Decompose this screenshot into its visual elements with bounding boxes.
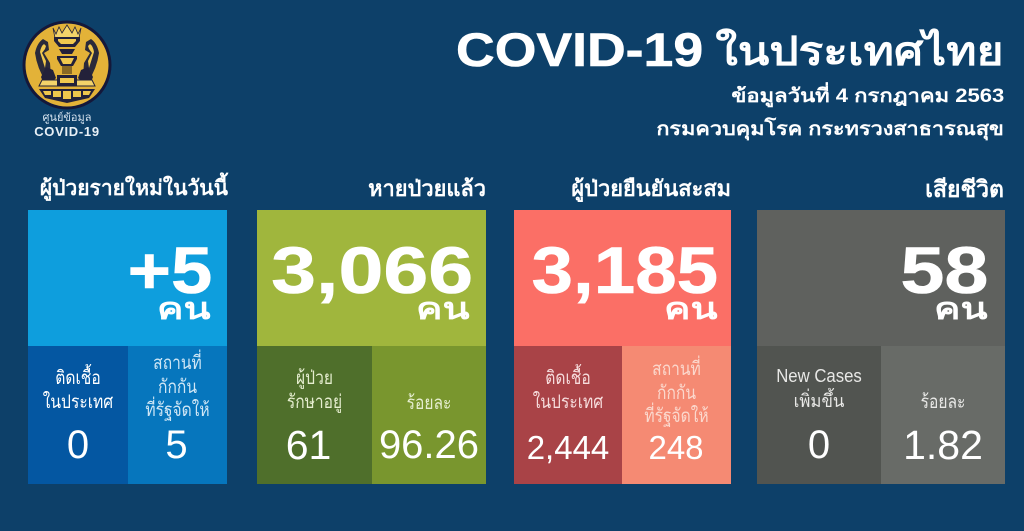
label: [43, 364, 113, 412]
number: 248: [648, 429, 704, 466]
label: [145, 350, 210, 421]
label: กักกัน: [657, 382, 696, 404]
value: 3,185: 3,185: [531, 233, 718, 307]
label: [533, 364, 603, 412]
date line: ข้อมูลวันที่ 4 กรกฎาคม 2563: [731, 86, 1004, 107]
label: เพิ่มขึ้น: [794, 391, 844, 411]
label: New Cases: [776, 366, 862, 386]
unit: คน: [157, 293, 211, 326]
title thai part: ในประเทศไทย: [716, 30, 1004, 74]
number: 0: [67, 423, 89, 467]
title latin part: COVID-19: [456, 23, 703, 76]
number: 61: [286, 422, 331, 468]
sub-panel: percent: [372, 346, 486, 484]
label: ในประเทศ: [43, 392, 113, 412]
logo caption: COVID-19: COVID-19: [34, 124, 100, 139]
unit: คน: [664, 293, 718, 326]
label: [644, 356, 709, 427]
value: 3,066: 3,066: [271, 233, 473, 307]
heading: cumulative confirmed: ผู้ป่วยยืนยันสะสม: [571, 176, 731, 201]
label: [287, 368, 342, 413]
source line: กรมควบคุมโรค กระทรวงสาธารณสุข: [656, 119, 1004, 140]
number: 0: [808, 423, 830, 467]
panel: new cases: [28, 210, 227, 484]
sub-panel: state quarantine: [128, 346, 227, 484]
number: 1.82: [903, 422, 983, 468]
label: ผู้ป่วย: [296, 368, 333, 389]
number: 5: [165, 423, 188, 467]
logo caption: ศูนย์ข้อมูล: [42, 112, 92, 124]
label: ร้อยละ: [407, 393, 451, 414]
sub-panel: percent: [881, 346, 1005, 484]
label: รักษาอยู่: [287, 392, 342, 412]
heading: recovered: หายป่วยแล้ว: [368, 176, 486, 201]
panel: cumulative confirmed: [514, 210, 731, 484]
unit: คน: [416, 293, 470, 326]
sub-panel: state quarantine: [622, 346, 731, 484]
label: สถานที่: [153, 353, 202, 374]
panel: recovered: [257, 210, 486, 484]
title: [456, 23, 1004, 76]
sub-panel: domestic: [514, 346, 622, 484]
number: 96.26: [379, 423, 479, 467]
label: ในประเทศ: [533, 392, 603, 412]
label: [776, 366, 862, 411]
label: ที่รัฐจัดให้: [145, 400, 210, 421]
label: กักกัน: [158, 376, 197, 398]
label: ติดเชื้อ: [55, 368, 101, 389]
emblem: government seal: [22, 20, 112, 110]
label: ร้อยละ: [921, 392, 965, 413]
heading: new cases today: ผู้ป่วยรายใหม่ในวันนี้: [40, 177, 228, 200]
number: 2,444: [527, 429, 609, 466]
sub-panel: in treatment: [257, 346, 372, 484]
panel: deaths: [757, 210, 1005, 484]
label: ที่รัฐจัดให้: [644, 406, 709, 427]
unit: คน: [934, 293, 988, 326]
label: สถานที่: [652, 359, 701, 380]
value: +5: +5: [127, 233, 212, 307]
value: 58: 58: [900, 233, 988, 307]
heading: deaths: เสียชีวิต: [925, 176, 1004, 202]
sub-panel: new cases added: [757, 346, 881, 484]
sub-panel: domestic: [28, 346, 128, 484]
label: ติดเชื้อ: [545, 368, 591, 389]
